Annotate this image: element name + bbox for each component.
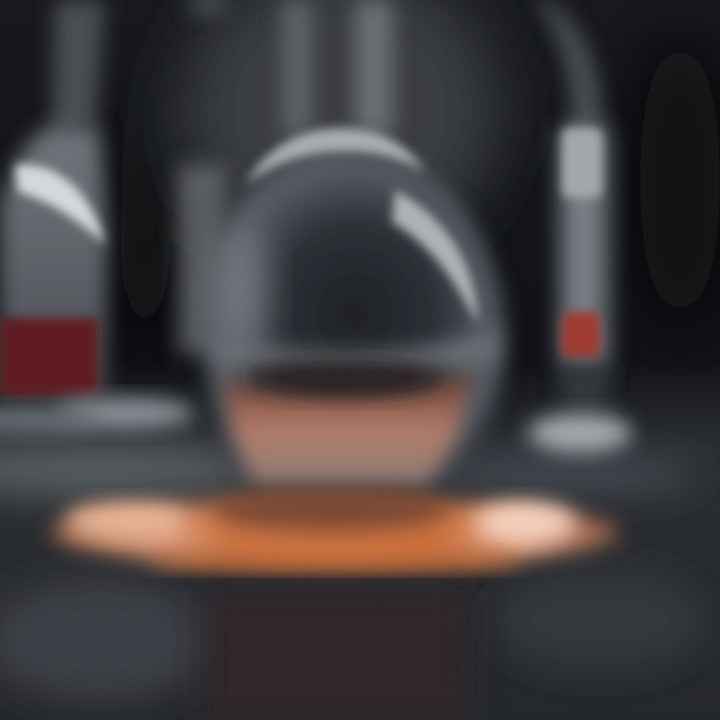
right bottle — [528, 125, 632, 453]
glowing orange disc — [50, 490, 620, 570]
floor — [0, 442, 705, 700]
floor reflection — [205, 590, 465, 720]
flask liquid — [225, 375, 470, 485]
flask top highlight — [245, 128, 425, 185]
flask right highlight — [392, 190, 478, 325]
back wall glow — [117, 0, 720, 360]
glass tubes at the top — [52, 0, 603, 355]
flask rim band — [215, 330, 498, 374]
central flask — [205, 128, 505, 485]
left bottle — [0, 125, 195, 434]
flask left glow — [214, 220, 266, 360]
